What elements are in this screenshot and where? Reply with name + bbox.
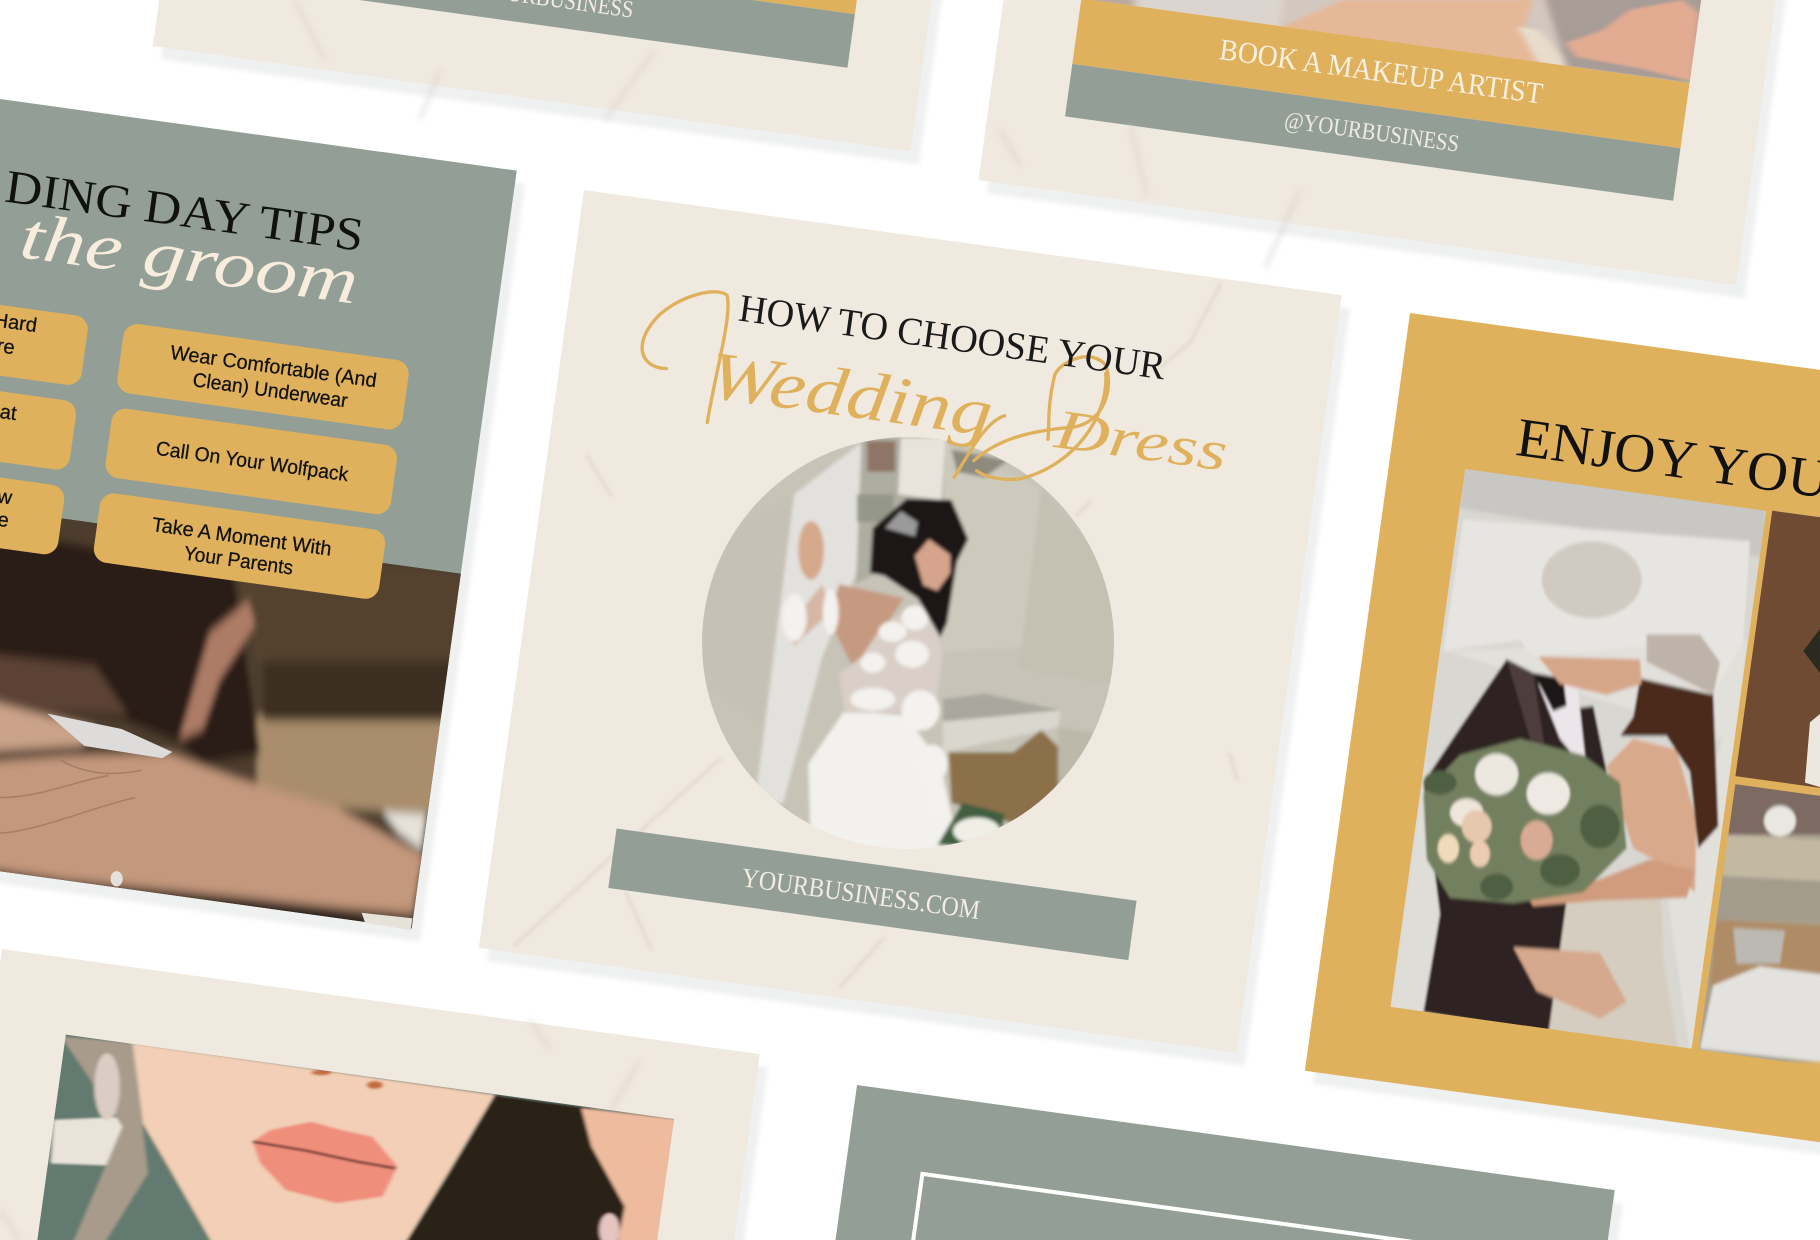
script title: wedding dress: Dress [1050,398,1231,484]
photo details: collar, fingers and ring [0,714,412,930]
photo: reception tables [1697,783,1820,1062]
panel: book a makeup artist post [977,0,1820,298]
website bar: YOURBUSINESS.COM [740,862,982,925]
photo: couple embracing with ring [0,518,461,928]
tip: wear comfortable underwear [116,322,410,431]
handle bar: @YOURBUSINESS [1283,108,1461,158]
gold banner: BOOK A MAKEUP ARTIST [1217,33,1545,111]
tip: take a moment with your parents: Your Parents [182,543,294,580]
tip: wear comfortable underwear: Clean) Underwear [191,369,349,413]
heading: how to choose your: HOW TO CHOOSE YOUR [736,287,1168,388]
script title: wedding dress [705,336,1233,484]
photo: cake on brown backdrop [1733,508,1820,794]
marble veins: lips post [0,1020,640,1240]
marble veins: dress post [514,284,1238,988]
tips content [0,135,430,601]
heading: DING DAY TIPS [2,161,367,262]
white inset frame [839,1174,1527,1240]
handle bar [1065,64,1680,201]
tip: take a moment with your parents [92,492,387,601]
script title: wedding dress: Wedding [705,336,997,451]
photo: woman with hand at neck [1093,0,1701,83]
handle bar [239,0,855,68]
tip: take a moment with your parents: Take A Moment With [151,514,333,561]
gold banner [1072,0,1690,148]
photo: lips close-up [31,1030,689,1240]
marble veins: top-left post [295,0,655,120]
script subheading: the groom [16,199,363,319]
marble veins: makeup post [1000,125,1300,268]
tip: call on your wolfpack [104,407,399,516]
tip: wear comfortable underwear: Wear Comfortable (And [169,342,378,392]
panel: how to choose your wedding dress [477,190,1352,1066]
website bar [608,829,1137,960]
panel: lips beauty post (cropped) [0,949,770,1240]
photo: bride in lace dress, circular crop [693,433,1125,859]
heading: ENJOY YOU [1513,406,1820,510]
tip: call on your wolfpack: Call On Your Wolfpack [155,438,351,486]
panel: wedding day tips for the groom [0,66,527,942]
panel: sage frame post (cropped) [750,1085,1625,1240]
panel: top-left post (cropped) [151,0,1026,164]
tip cards left column (cropped) [0,278,90,556]
script flourishes [642,292,1108,479]
photo: couple kissing under veil [1383,459,1773,1062]
